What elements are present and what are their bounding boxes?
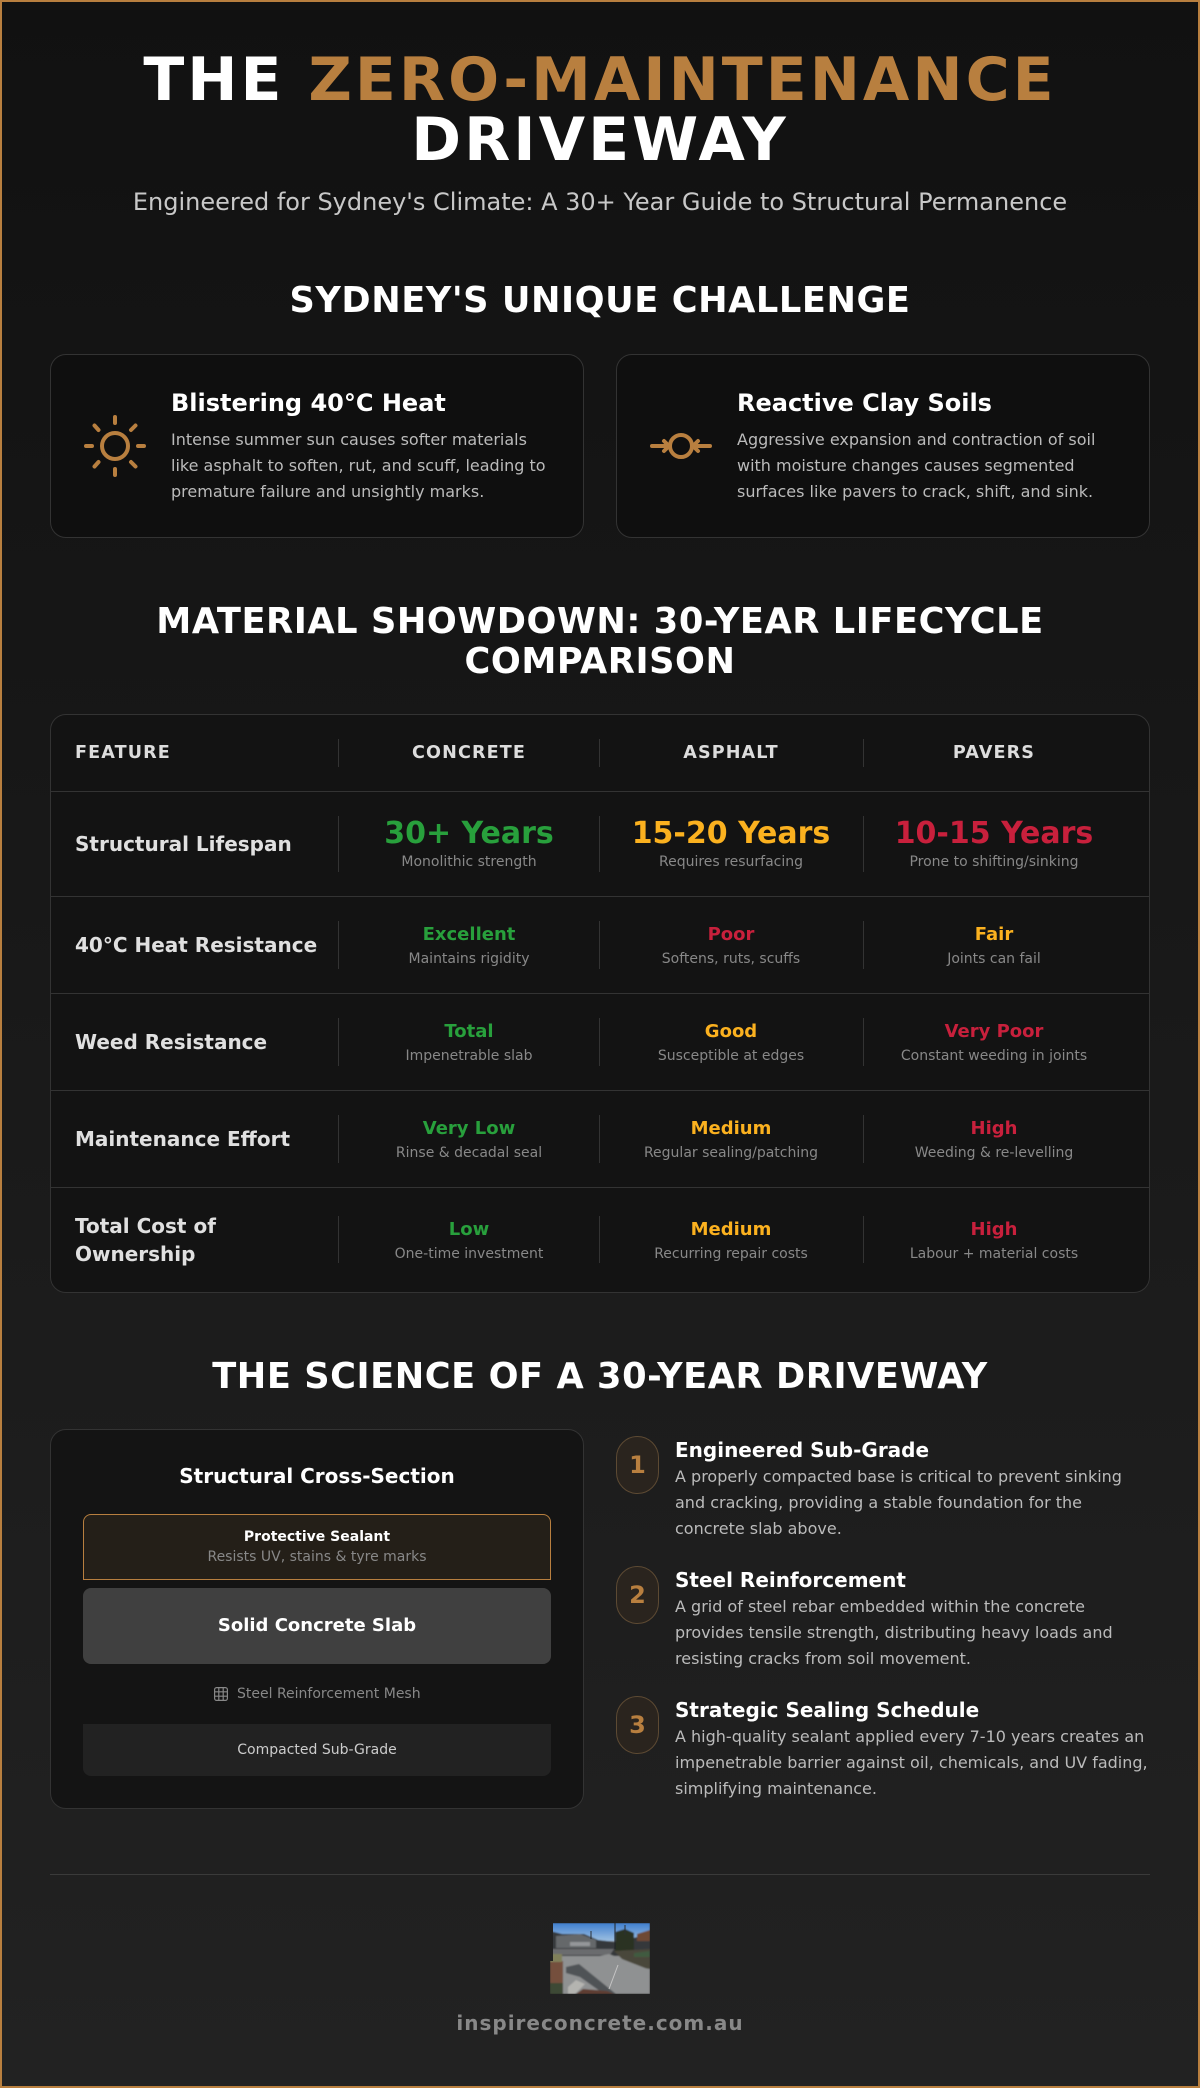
comparison table	[50, 714, 1150, 1293]
icon: mesh	[214, 1687, 228, 1701]
badge 3: 3	[629, 1711, 646, 1739]
step 2	[616, 1566, 1113, 1668]
heading: material showdown: MATERIAL SHOWDOWN: 30-YEAR LIFECYCLE	[156, 601, 1044, 642]
heading: heat: Blistering 40°C Heat	[171, 389, 446, 417]
step 3 text: impenetrable barrier against oil, chemicals, and UV fading,	[675, 1753, 1148, 1772]
badge 2: 2	[629, 1581, 646, 1609]
row: maintenance effort: Weeding & re-levelling	[915, 1145, 1073, 1161]
layer: protective sealant: Protective Sealant	[244, 1528, 390, 1544]
row: weed resistance	[75, 1021, 1087, 1064]
row: maintenance effort: High	[971, 1118, 1017, 1139]
step 1 text: concrete slab above.	[675, 1519, 842, 1538]
row: weed resistance: Total	[444, 1021, 494, 1042]
text: heat: Intense summer sun causes softer materials	[171, 430, 527, 449]
layer: steel mesh: Steel Reinforcement Mesh	[237, 1686, 421, 1702]
text: clay: Aggressive expansion and contraction of soil	[737, 430, 1095, 449]
row: structural lifespan: Requires resurfacing	[659, 854, 803, 870]
row: structural lifespan: 15-20 Years	[632, 816, 830, 851]
row: heat resistance	[75, 924, 1041, 967]
step 1 text	[675, 1467, 1122, 1538]
layer: sub-grade	[83, 1724, 551, 1776]
layer: sub-grade: Compacted Sub-Grade	[237, 1742, 397, 1758]
badge 1: 1	[629, 1451, 646, 1479]
text: clay: surfaces like pavers to crack, shift, and sink.	[737, 482, 1093, 501]
layer: concrete slab: Solid Concrete Slab	[218, 1615, 416, 1636]
row: total cost: Labour + material costs	[910, 1246, 1078, 1262]
row: maintenance effort: Medium	[691, 1118, 771, 1139]
row: maintenance effort	[75, 1118, 1073, 1161]
row: heat resistance: Excellent	[423, 924, 515, 945]
row: structural lifespan	[75, 816, 1093, 870]
row: maintenance effort: Rinse & decadal seal	[396, 1145, 542, 1161]
row: total cost: High	[971, 1219, 1017, 1240]
heading: Sydney's unique challenge: SYDNEY'S UNIQUE CHALLENGE	[289, 280, 910, 321]
heading: material showdown	[156, 601, 1044, 682]
row: total cost: Medium	[691, 1219, 771, 1240]
row: heat resistance: Joints can fail	[947, 951, 1041, 967]
row: heat resistance: 40°C Heat Resistance	[75, 933, 317, 957]
step 3 text: A high-quality sealant applied every 7-10 years creates an	[675, 1727, 1144, 1746]
badge 1	[616, 1436, 659, 1494]
layer: protective sealant	[83, 1514, 551, 1580]
row: weed resistance: Constant weeding in joints	[901, 1048, 1087, 1064]
title: THE ZERO-MAINTENANCE	[143, 45, 1057, 115]
step 2 text: A grid of steel rebar embedded within the concrete	[675, 1597, 1085, 1616]
row: structural lifespan: Prone to shifting/sinking	[909, 854, 1079, 870]
row: weed resistance: Weed Resistance	[75, 1030, 267, 1054]
step 3 text	[675, 1727, 1148, 1798]
row: weed resistance: Susceptible at edges	[658, 1048, 804, 1064]
row: total cost	[75, 1214, 1078, 1266]
row: heat resistance: Poor	[708, 924, 754, 945]
table header: CONCRETE	[412, 743, 526, 763]
step 1 text: A properly compacted base is critical to prevent sinking	[675, 1467, 1122, 1486]
table header: ASPHALT	[683, 743, 779, 763]
row: structural lifespan: Monolithic strength	[401, 854, 537, 870]
row: weed resistance: Impenetrable slab	[405, 1048, 533, 1064]
text: heat: like asphalt to soften, rut, and scuff, leading to	[171, 456, 546, 475]
step 2 text: resisting cracks from soil movement.	[675, 1649, 971, 1668]
icon: compression	[650, 433, 712, 459]
heading: cross-section: Structural Cross-Section	[179, 1464, 455, 1488]
footer logo: driveway photo	[550, 1923, 650, 1994]
row: maintenance effort: Regular sealing/patching	[644, 1145, 818, 1161]
step 1 text: and cracking, providing a stable foundation for the	[675, 1493, 1082, 1512]
text: clay: with moisture changes causes segmented	[737, 456, 1075, 475]
step 1	[616, 1436, 1122, 1538]
heading: the science: THE SCIENCE OF A 30-YEAR DRIVEWAY	[212, 1356, 988, 1397]
footer url: inspireconcrete.com.au	[456, 2011, 744, 2035]
step 1 title: Engineered Sub-Grade	[675, 1438, 929, 1462]
row: total cost: One-time investment	[395, 1246, 543, 1262]
panel: structural cross-section	[50, 1429, 584, 1809]
subtitle: Engineered for Sydney's Climate: A 30+ Year Guide to Structural Permanence	[133, 188, 1067, 216]
layer: protective sealant: Resists UV, stains & tyre marks	[207, 1548, 427, 1564]
step 2 title: Steel Reinforcement	[675, 1568, 906, 1592]
panel: heat	[50, 354, 584, 538]
heading: material showdown: COMPARISON	[464, 641, 736, 682]
row: total cost: Total Cost of	[75, 1214, 216, 1238]
heading: clay: Reactive Clay Soils	[737, 389, 992, 417]
row: structural lifespan: Structural Lifespan	[75, 832, 292, 856]
panel: clay soils	[616, 354, 1150, 538]
table header	[75, 743, 1035, 763]
row: total cost: Low	[449, 1219, 489, 1240]
row: heat resistance: Softens, ruts, scuffs	[662, 951, 800, 967]
row: maintenance effort: Maintenance Effort	[75, 1127, 290, 1151]
step 2 text: provides tensile strength, distributing heavy loads and	[675, 1623, 1113, 1642]
row: weed resistance: Very Poor	[945, 1021, 1043, 1042]
step 3 text: simplifying maintenance.	[675, 1779, 877, 1798]
table header: FEATURE	[75, 743, 171, 763]
table header: PAVERS	[953, 743, 1035, 763]
title	[143, 45, 1057, 175]
badge 2	[616, 1566, 659, 1624]
step 3 title: Strategic Sealing Schedule	[675, 1698, 979, 1722]
layer: concrete slab	[83, 1588, 551, 1664]
text: clay	[737, 430, 1095, 501]
row: heat resistance: Maintains rigidity	[409, 951, 529, 967]
row: total cost: Recurring repair costs	[654, 1246, 808, 1262]
text: heat	[171, 430, 546, 501]
step 2 text	[675, 1597, 1113, 1668]
row: structural lifespan: 30+ Years	[384, 816, 554, 851]
badge 3	[616, 1696, 659, 1754]
step 3	[616, 1696, 1148, 1798]
row: heat resistance: Fair	[975, 924, 1013, 945]
row: maintenance effort: Very Low	[423, 1118, 515, 1139]
icon: sun	[84, 415, 146, 477]
title: DRIVEWAY	[411, 105, 789, 175]
row: total cost: Ownership	[75, 1242, 195, 1266]
row: structural lifespan: 10-15 Years	[895, 816, 1093, 851]
row: weed resistance: Good	[705, 1021, 757, 1042]
text: heat: premature failure and unsightly marks.	[171, 482, 484, 501]
